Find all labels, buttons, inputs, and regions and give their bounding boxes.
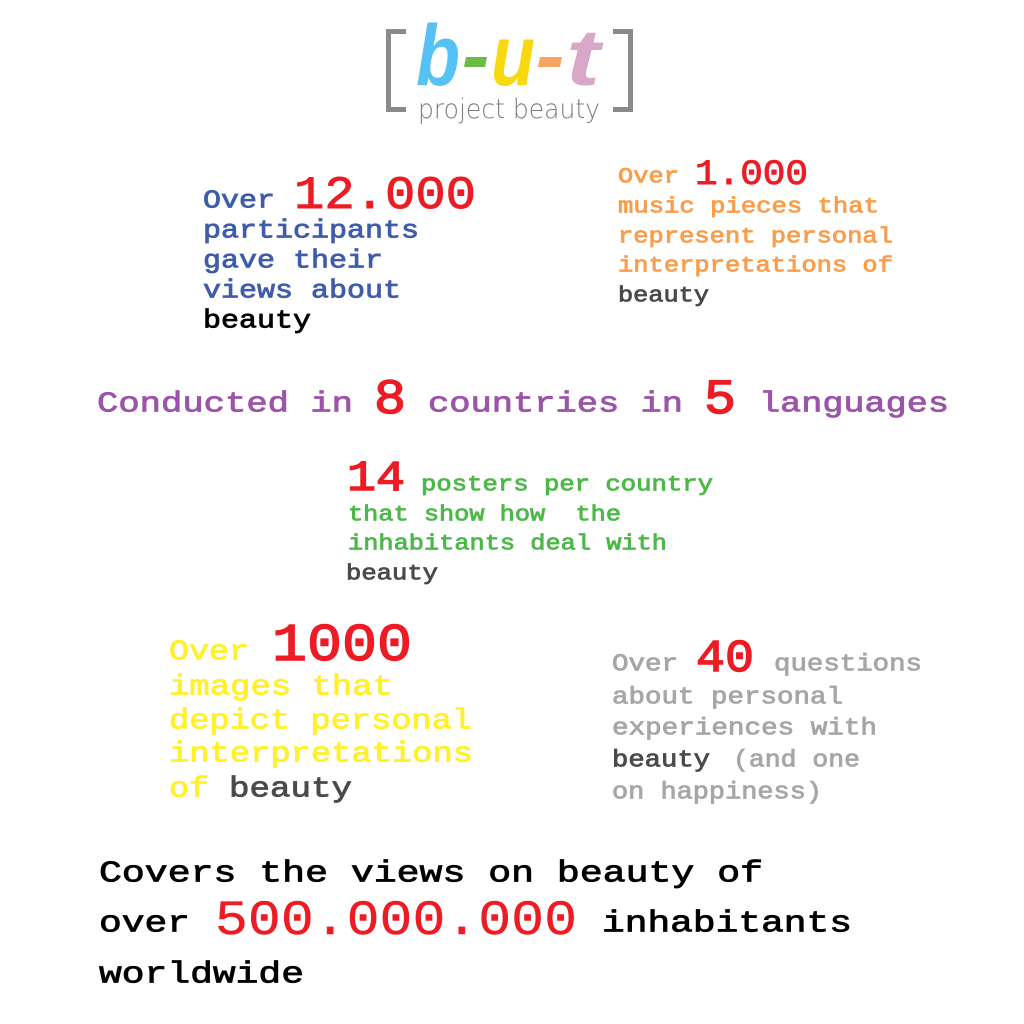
text block: participants: participants bbox=[203, 216, 419, 246]
text block: countries and languages bbox=[97, 372, 949, 428]
logo: b-u-t project beauty bbox=[388, 8, 630, 125]
text block: images: 1000 bbox=[272, 616, 412, 676]
text block: questions bbox=[612, 634, 922, 806]
text block: covers inhabitants: 500.000.000 bbox=[215, 893, 577, 949]
text block: images: depict personal bbox=[169, 704, 472, 738]
text block: participants bbox=[203, 170, 476, 336]
text block: music pieces bbox=[618, 155, 893, 308]
text block: images: images that bbox=[169, 670, 393, 704]
text block: questions: beauty bbox=[612, 748, 710, 774]
text block: covers inhabitants: over bbox=[99, 906, 190, 942]
text block: images: interpretations bbox=[169, 738, 473, 770]
text block: posters: that show how the bbox=[348, 502, 621, 528]
text block: posters: inhabitants deal with bbox=[348, 530, 667, 556]
text block: posters bbox=[346, 454, 713, 586]
text block: posters: beauty bbox=[346, 560, 438, 586]
icon: left bracket bbox=[388, 32, 406, 110]
text block: participants: Over bbox=[203, 186, 275, 216]
icon: right bracket bbox=[613, 32, 630, 110]
text block: countries and languages: languages bbox=[759, 388, 949, 420]
text block: questions: experiences with bbox=[612, 716, 877, 742]
logo letter u: u bbox=[491, 8, 535, 104]
text block: music pieces: beauty bbox=[618, 282, 709, 308]
text block: music pieces: music pieces that bbox=[618, 194, 879, 220]
logo dash green bbox=[464, 57, 487, 67]
text block: covers inhabitants: worldwide bbox=[99, 958, 304, 992]
text block: music pieces: Over bbox=[618, 164, 679, 190]
text block: participants: 12.000 bbox=[294, 170, 476, 222]
text block: posters: posters per country bbox=[421, 472, 713, 498]
text block: questions: Over bbox=[612, 652, 678, 678]
text block: images bbox=[169, 616, 473, 806]
text block: covers inhabitants bbox=[99, 856, 852, 992]
text block: participants: beauty bbox=[203, 306, 311, 336]
text block: images: Over bbox=[169, 636, 249, 668]
text block: countries and languages: 8 bbox=[374, 372, 406, 428]
text block: questions: about personal bbox=[612, 684, 843, 712]
text block: covers inhabitants: inhabitants bbox=[602, 906, 852, 942]
text block: participants: gave their bbox=[203, 246, 383, 276]
text block: questions: questions bbox=[774, 652, 922, 678]
text block: music pieces: interpretations of bbox=[618, 252, 893, 278]
text block: music pieces: represent personal bbox=[618, 224, 893, 250]
text block: participants: views about bbox=[203, 276, 401, 306]
text block: covers inhabitants: Covers the views on beauty of bbox=[99, 856, 763, 892]
text block: questions: on happiness) bbox=[612, 780, 822, 806]
text block: music pieces: 1.000 bbox=[695, 155, 808, 195]
logo dash orange bbox=[538, 57, 562, 67]
text block: questions: 40 bbox=[696, 634, 754, 685]
text block: questions: (and one bbox=[733, 748, 860, 774]
logo letter b: b bbox=[416, 8, 460, 104]
logo tagline: project beauty bbox=[418, 94, 600, 125]
logo letter t: t bbox=[566, 13, 604, 102]
text block: countries and languages: countries in bbox=[428, 388, 683, 420]
text block: countries and languages: Conducted in bbox=[97, 388, 353, 420]
text block: posters: 14 bbox=[347, 454, 405, 503]
text block: countries and languages: 5 bbox=[704, 372, 736, 428]
text block: images: beauty bbox=[229, 772, 352, 806]
text block: images: of bbox=[169, 772, 209, 806]
